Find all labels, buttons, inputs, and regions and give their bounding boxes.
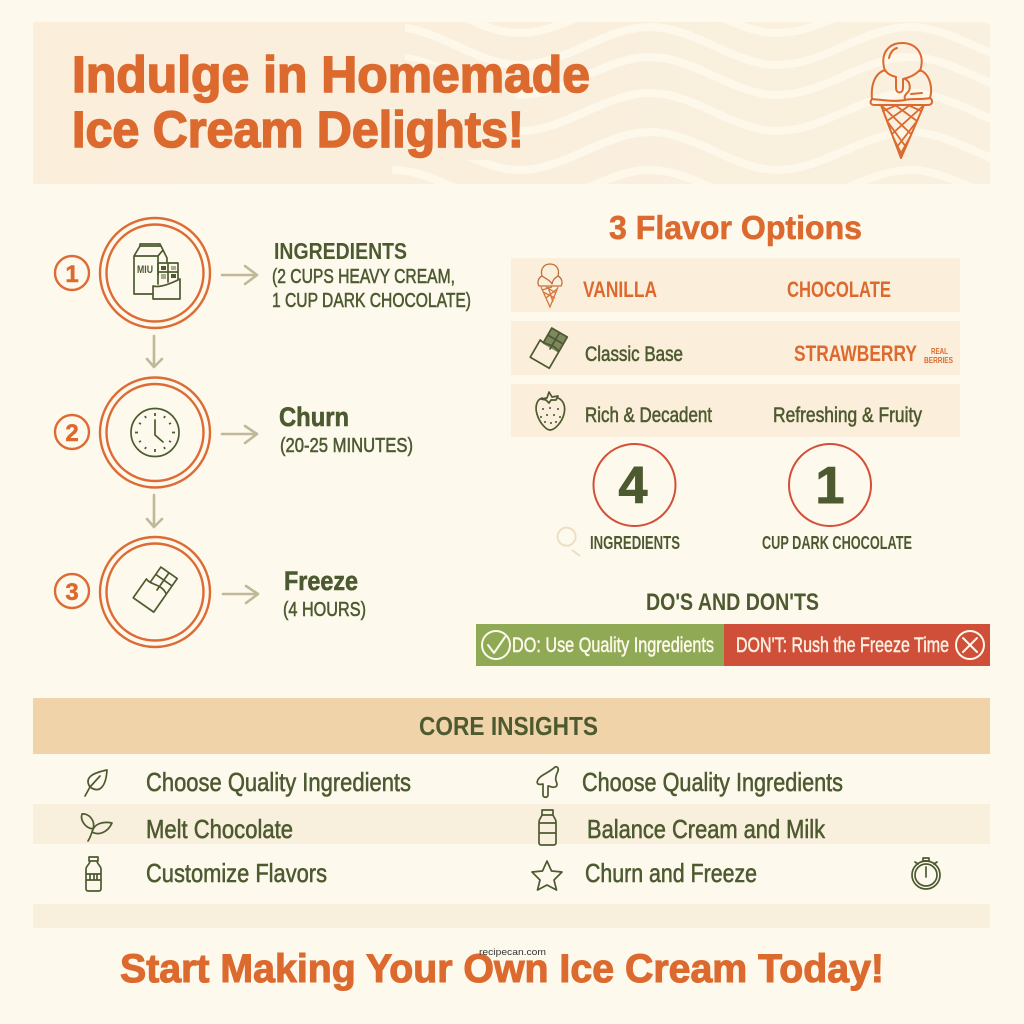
refreshing and fruity: Refreshing & Fruity (773, 404, 922, 427)
arrow: step 2 to 3 (147, 495, 162, 527)
panel: don't (724, 624, 990, 666)
icon: cross (956, 631, 984, 659)
step number 2 (55, 415, 89, 449)
icon: check (482, 631, 510, 659)
heading: do's and don'ts: DO'S AND DON'TS (646, 589, 819, 616)
stat: 4 ingredients: INGREDIENTS (590, 533, 680, 553)
panel: flavor row 1 (511, 258, 960, 312)
core insights header (33, 698, 990, 754)
core insights header: CORE INSIGHTS (419, 711, 598, 741)
panel: flavor row 2 (511, 321, 960, 375)
step 1 text: INGREDIENTS (274, 238, 407, 264)
heading: flavor options: 3 Flavor Options (609, 209, 862, 246)
icon: small cone (541, 287, 558, 307)
step ring 2 (100, 378, 210, 488)
stat: 4 ingredients: 4 (619, 457, 648, 515)
insight: melt chocolate: Melt Chocolate (146, 814, 293, 844)
insight: choose quality ingredients left: Choose Quality Ingredients (146, 767, 411, 797)
step number 3: 3 (65, 579, 79, 606)
real berries tag: REAL (931, 347, 948, 356)
real berries tag (924, 347, 954, 365)
icon: star (532, 861, 562, 890)
icon: small ice cream (538, 264, 562, 286)
step 1 text: 1 CUP DARK CHOCOLATE) (272, 290, 471, 312)
icon: milk carton and chocolate: MIU (137, 264, 153, 276)
icon: faint magnifier (558, 528, 580, 556)
classic base: Classic Base (585, 343, 683, 366)
arrow (222, 266, 257, 284)
arrow (222, 426, 257, 443)
icon: strawberry (536, 392, 565, 430)
step 3 text: (4 HOURS) (283, 599, 366, 621)
icon: ice cream cone (871, 43, 932, 158)
insight: balance cream and milk: Balance Cream and Milk (587, 814, 826, 844)
stat: 4 ingredients (558, 444, 680, 556)
insight: choose quality ingredients right: Choose Quality Ingredients (582, 767, 843, 797)
step 2 text: (20-25 MINUTES) (280, 435, 413, 457)
insight: churn and freeze: Churn and Freeze (585, 858, 757, 888)
icon: milk bottle (539, 810, 556, 845)
icon: clock (131, 408, 179, 456)
step 3 text (283, 566, 366, 621)
step 2: churn (55, 378, 413, 488)
title (72, 46, 590, 158)
arrow (223, 586, 258, 603)
panel: flavor row 3 (511, 384, 960, 437)
step 1 text (272, 238, 471, 312)
step 3 text: Freeze (284, 566, 358, 596)
step number 3 (55, 574, 89, 608)
flavor: chocolate: CHOCOLATE (787, 277, 891, 302)
stat: 1 cup dark chocolate: 1 (816, 457, 844, 515)
step 1 text: (2 CUPS HEAVY CREAM, (272, 266, 455, 288)
icon: chocolate (530, 326, 567, 368)
step number 1: 1 (65, 261, 79, 288)
step 2 text: Churn (279, 402, 349, 432)
panel: don't: DON'T: Rush the Freeze Time (736, 634, 949, 657)
title: Ice Cream Delights! (72, 101, 524, 158)
icon: chocolate bar (133, 564, 177, 612)
step 1: ingredients (55, 218, 471, 328)
step number 2: 2 (65, 420, 79, 447)
step 2 text (279, 402, 413, 457)
stat: 1 cup dark chocolate (762, 444, 912, 553)
rich and decadent: Rich & Decadent (585, 404, 712, 427)
step 3: freeze (55, 537, 366, 647)
icon: leaf (85, 770, 107, 796)
step number 1 (55, 256, 89, 290)
header banner (33, 22, 990, 184)
real berries tag: BERRIES (924, 356, 954, 365)
flavor: strawberry: STRAWBERRY (794, 341, 917, 366)
panel: do (476, 624, 724, 666)
title: Indulge in Homemade (72, 46, 590, 103)
icon: bottle (86, 857, 101, 891)
call to action: Start Making Your Own Ice Cream Today! (120, 947, 884, 991)
icon: stopwatch (912, 858, 940, 889)
insight: customize flavors: Customize Flavors (146, 858, 327, 888)
icon: milk carton and chocolate (134, 244, 180, 299)
icon: sprout (82, 814, 112, 841)
panel: do: DO: Use Quality Ingredients (512, 634, 714, 657)
arrow: step 1 to 2 (147, 336, 162, 367)
stat: 1 cup dark chocolate: CUP DARK CHOCOLATE (762, 533, 912, 553)
step ring 1 (100, 218, 210, 328)
icon: chocolate drip (537, 767, 558, 797)
step ring 3 (100, 537, 210, 647)
flavor: vanilla: VANILLA (583, 277, 657, 302)
panel: core insights list (33, 767, 990, 928)
watermark: recipecan.com (479, 947, 546, 958)
